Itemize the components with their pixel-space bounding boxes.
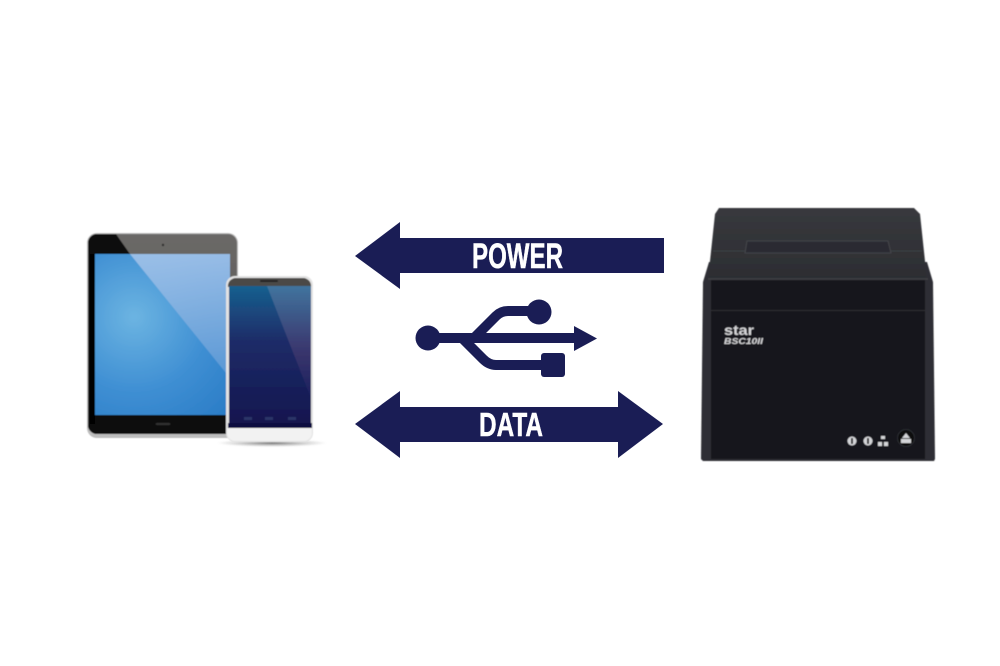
paper slot — [745, 241, 891, 253]
brand logo — [724, 322, 764, 346]
printer top cover — [708, 208, 927, 280]
arrow: data, double-headed — [355, 391, 663, 458]
printer side panels — [701, 262, 935, 461]
tablet — [87, 233, 238, 438]
icon: receipt printer — [701, 208, 935, 461]
label: power: POWER — [472, 237, 563, 276]
brand logo: star — [724, 322, 755, 338]
icon: tablet and smartphone — [87, 233, 327, 447]
label: data: DATA — [479, 406, 543, 443]
arrow: power, pointing left — [355, 222, 664, 289]
control panel icons — [848, 430, 914, 446]
printer front face — [711, 311, 925, 459]
phone shadow — [217, 439, 327, 447]
printer upper front band — [711, 280, 925, 310]
icon: USB symbol — [416, 300, 597, 377]
smartphone — [226, 276, 313, 442]
brand logo: BSC10II — [724, 337, 764, 346]
